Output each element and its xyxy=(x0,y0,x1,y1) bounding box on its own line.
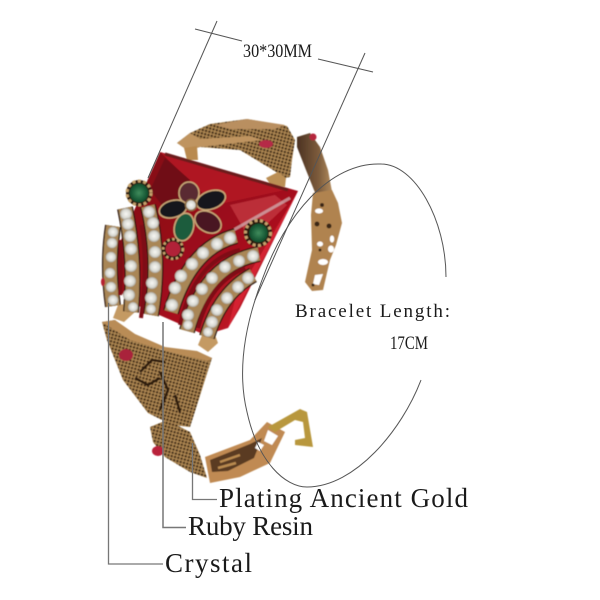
bracelet length arc xyxy=(243,164,446,487)
upper gold link xyxy=(177,119,295,187)
crystal strands xyxy=(110,206,259,337)
strand backing xyxy=(110,206,259,337)
label: ruby resin: Ruby Resin xyxy=(188,511,314,541)
lower gold link xyxy=(102,303,218,427)
red side stone xyxy=(101,278,105,286)
label: plating ancient gold: Plating Ancient Gold xyxy=(219,483,468,513)
leader: plating ancient gold xyxy=(192,443,217,500)
leader: crystal xyxy=(108,303,163,564)
bracelet xyxy=(101,119,342,483)
gold clasp xyxy=(268,409,313,447)
label: 17CM: 17CM xyxy=(390,333,428,354)
strand gold frame xyxy=(110,206,259,337)
label: crystal: Crystal xyxy=(165,548,252,578)
label: bracelet length: Bracelet Length: xyxy=(295,301,450,322)
leader: ruby resin xyxy=(163,322,186,528)
small ruby stone xyxy=(162,238,184,260)
crystals xyxy=(105,206,259,337)
label: 30*30MM: 30*30MM xyxy=(243,41,312,62)
green stone left xyxy=(126,180,152,206)
upper right bronze link xyxy=(297,133,342,291)
lower bronze band xyxy=(205,422,285,483)
flower xyxy=(157,182,228,243)
green stone right xyxy=(244,219,272,247)
red between strands xyxy=(120,225,245,328)
lower hinge link with ruby xyxy=(150,420,207,478)
dimension lines: 30*30MM xyxy=(148,21,373,300)
ruby resin square xyxy=(110,152,298,335)
